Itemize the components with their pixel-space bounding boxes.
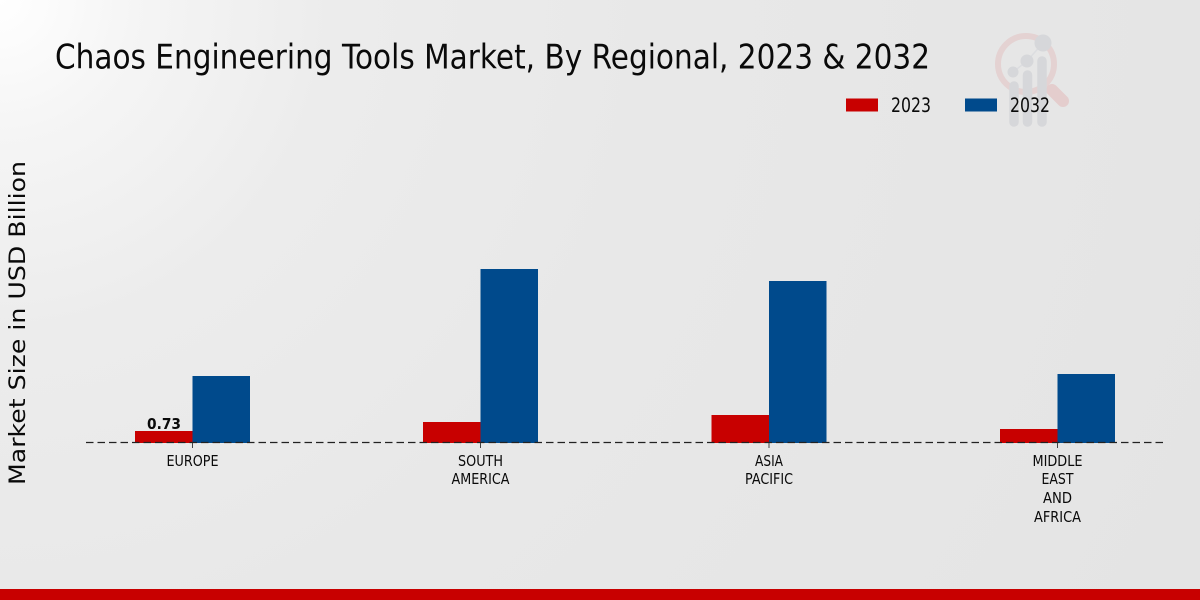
category label South America <box>452 452 510 488</box>
legend <box>846 94 1050 117</box>
bottom red band <box>0 589 1200 600</box>
category label Asia Pacific <box>745 452 793 488</box>
bars: Middle East and Africa <box>1000 374 1115 443</box>
y axis label: Market Size in USD Billion <box>5 161 31 485</box>
category label Middle East and Africa: MIDDLE <box>1032 452 1082 470</box>
data label 0.73: 0.73 <box>147 415 181 433</box>
legend label 2032: 2032 <box>1010 94 1050 117</box>
category label Middle East and Africa: AND <box>1043 489 1072 507</box>
title: Chaos Engineering Tools Market, By Regional, 2023 & 2032 <box>55 38 930 78</box>
legend swatch 2023 <box>846 98 878 112</box>
category label Middle East and Africa <box>1032 452 1082 526</box>
bars: South America <box>423 269 538 443</box>
category label Middle East and Africa: AFRICA <box>1034 508 1081 526</box>
icon: magnifier logo watermark <box>998 34 1063 122</box>
category label Asia Pacific: PACIFIC <box>745 470 793 488</box>
legend swatch 2032 <box>965 98 997 112</box>
bars: Europe <box>135 376 250 443</box>
category label South America: SOUTH <box>458 452 503 470</box>
legend label 2023: 2023 <box>891 94 931 117</box>
category label Middle East and Africa: EAST <box>1042 470 1074 488</box>
category label Europe: EUROPE <box>166 452 218 470</box>
category label South America: AMERICA <box>452 470 510 488</box>
baseline axis <box>86 442 1164 444</box>
bar chart <box>86 269 1164 526</box>
category label Asia Pacific: ASIA <box>755 452 783 470</box>
bars: Asia Pacific <box>712 281 826 443</box>
